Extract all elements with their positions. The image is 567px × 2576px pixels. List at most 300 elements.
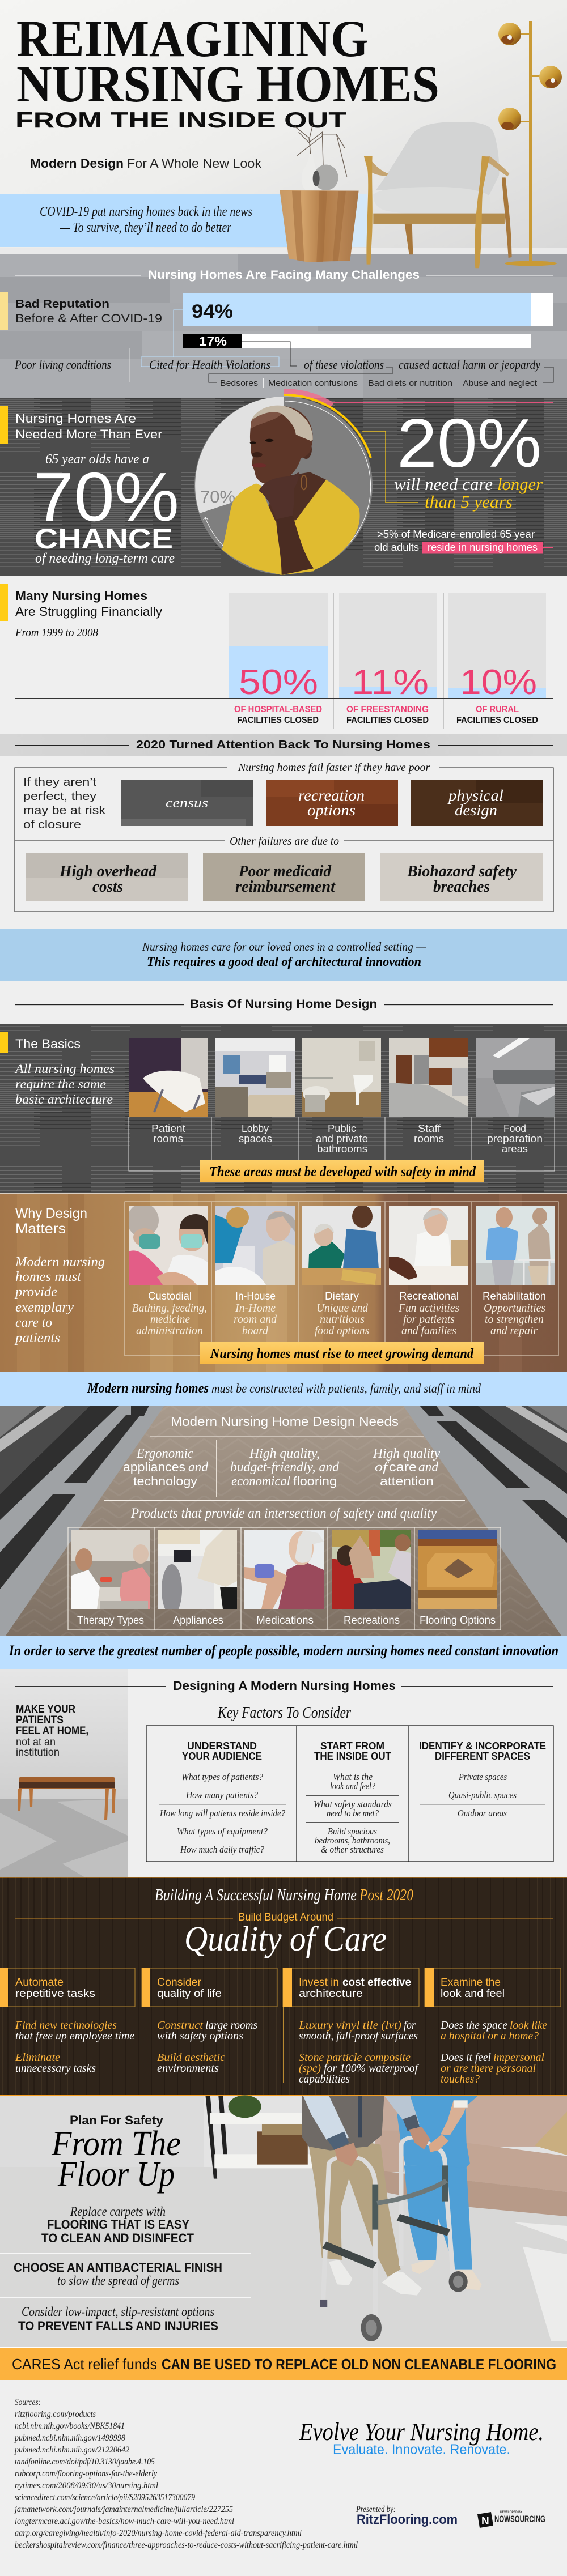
photo: man with walker [302, 2096, 422, 2296]
section title: struggling: Are Struggling Financially [15, 604, 162, 619]
care labels: food options [315, 1325, 369, 1337]
card: examine: a hospital or a home? [441, 2030, 539, 2042]
room labels: Staff [418, 1123, 441, 1134]
column: start from the inside out: What is the [333, 1772, 373, 1782]
panel: why design matters [0, 1194, 567, 1372]
need: quality of care: and [418, 1460, 439, 1475]
room labels: preparation [487, 1133, 543, 1144]
need: ergonomic appliances: and [188, 1460, 209, 1475]
banner: cares act: CARES Act relief funds [12, 2356, 157, 2373]
panel: basis heading: Basis Of Nursing Home Design [190, 998, 377, 1011]
heading: designing: Designing A Modern Nursing Homes [173, 1679, 396, 1693]
box: recreation options [266, 780, 398, 826]
card: consider: Consider [157, 1977, 202, 1989]
card: invest: cost effective [342, 1977, 411, 1989]
closing message [299, 2418, 544, 2458]
panel: designing a modern nursing home [0, 1669, 567, 1877]
room labels: and private [316, 1133, 368, 1144]
presented by ritzflooring [356, 2505, 458, 2527]
column: start from the inside out: START FROM [320, 1740, 384, 1752]
frame: products [68, 1527, 501, 1630]
blue band: constructed with patients in mind: must be constructed with patients, family, and staff in mind [211, 1381, 481, 1395]
violation types: Abuse and neglect [463, 378, 538, 388]
products heading: Products that provide an intersection of safety and quality [130, 1506, 437, 1521]
closing message: Evaluate. Innovate. Renovate. [333, 2442, 510, 2458]
closure risk text: If they aren’t [23, 776, 97, 789]
need: ergonomic appliances [123, 1446, 209, 1488]
box: biohazard safety breaches: breaches [433, 878, 490, 896]
photo: kitchen [476, 1038, 555, 1117]
care labels [132, 1291, 546, 1337]
safety heading: From The [51, 2124, 181, 2163]
patients message: institution [16, 1747, 60, 1759]
panel: financial struggle [0, 576, 567, 929]
column: understand your audience: UNDERSTAND [187, 1740, 257, 1752]
care labels: administration [136, 1325, 203, 1337]
photo: flooring options [418, 1530, 497, 1609]
violation types: Medication confusions [268, 378, 358, 388]
care labels: Rehabilitation [483, 1291, 546, 1302]
section title: the basics: The Basics [15, 1037, 81, 1051]
subtitle: Modern Design [30, 156, 124, 171]
need: budget-friendly flooring [230, 1446, 340, 1489]
subtitle: For A Whole New Look [127, 156, 262, 171]
card: automate: Find new technologies [15, 2019, 117, 2032]
panel: footer [0, 2380, 567, 2576]
column: start from the inside out: THE INSIDE OUT [314, 1751, 391, 1762]
safety tip: carpets: TO CLEAN AND DISINFECT [41, 2231, 194, 2245]
photo: nurse [384, 2096, 482, 2290]
section title: the basics: require the same [15, 1077, 106, 1091]
panel: hero [0, 0, 567, 398]
callout: safety: These areas must be developed with safety in mind [209, 1165, 476, 1180]
product labels: Flooring Options [420, 1615, 496, 1627]
lamp [498, 21, 562, 266]
section title: the basics: All nursing homes [14, 1062, 115, 1076]
photo: medications [244, 1530, 324, 1609]
card: examine: look like [510, 2019, 547, 2032]
card: invest: Stone particle composite [299, 2051, 411, 2064]
stat: 20 percent [394, 405, 543, 512]
column: start from the inside out: Build spacious [328, 1826, 377, 1837]
column: understand your audience: What types of equipment? [177, 1826, 268, 1837]
callout: growing demand [200, 1342, 484, 1364]
photo: walker [320, 2127, 468, 2341]
chart: closures: FACILITIES CLOSED [237, 716, 319, 725]
card: automate [0, 1968, 135, 2075]
heading: post 2020: Building A Successful Nursing Home [155, 1887, 357, 1904]
section title: the basics: basic architecture [15, 1092, 113, 1106]
violation types: Bedsores [220, 378, 258, 388]
violations text: Poor living conditions [14, 357, 111, 372]
photo: therapy types [71, 1530, 150, 1609]
card: invest: for [404, 2019, 416, 2032]
closure risk text: may be at risk [23, 804, 106, 817]
card: consider: Build aesthetic [157, 2051, 225, 2064]
room labels: rooms [414, 1133, 444, 1144]
patients message: FEEL AT HOME, [16, 1725, 88, 1737]
patients message: MAKE YOUR [16, 1704, 75, 1715]
violations text: Cited for Health Violations [149, 357, 270, 372]
stat: 70 percent: of needing long-term care [35, 551, 175, 566]
column: understand your audience: How many patients? [185, 1790, 258, 1800]
chart: closures [15, 593, 553, 729]
heading: design needs: Modern Nursing Home Design Needs [171, 1414, 399, 1429]
sources: ritzflooring.com/products [15, 2409, 96, 2419]
care labels: Custodial [148, 1291, 192, 1302]
section title: bad reputation: Before & After COVID-19 [15, 312, 162, 325]
sources: pubmed.ncbi.nlm.nih.gov/1499998 [14, 2433, 125, 2443]
yellow connector [362, 431, 418, 503]
box: physical design [411, 780, 543, 826]
connectors [129, 310, 553, 382]
patients message: not at an [16, 1736, 56, 1748]
product labels: Recreations [344, 1615, 400, 1627]
section title: why design matters: exemplary [15, 1300, 74, 1315]
column: understand your audience: What types of patients? [181, 1772, 263, 1782]
heading: challenges: Nursing Homes Are Facing Many Challenges [148, 269, 420, 282]
column: start from the inside out: need to be met? [327, 1808, 379, 1819]
need: ergonomic appliances: appliances [123, 1460, 185, 1474]
chart: closures: OF HOSPITAL-BASED [234, 705, 322, 714]
room labels: rooms [153, 1133, 183, 1144]
column: start from the inside out: What safety standards [314, 1799, 392, 1809]
panel: building a successful nursing home [0, 1877, 567, 2096]
panel: the basics [0, 1024, 567, 1193]
stat: 70 percent: 65 year olds have a [45, 452, 149, 467]
stat: 20 percent: will need care [394, 474, 493, 494]
card: consider: large rooms [205, 2019, 257, 2032]
violations text [14, 357, 540, 372]
card: examine [425, 1968, 561, 2085]
closure risk text [23, 776, 106, 831]
box: high overhead costs: High overhead [59, 863, 157, 880]
section title: bad reputation [0, 292, 162, 330]
room labels: spaces [239, 1133, 272, 1144]
need: ergonomic appliances: Ergonomic [136, 1446, 193, 1461]
panel: challenges [0, 269, 553, 388]
section title: needed: Nursing Homes Are [15, 411, 136, 425]
section title: struggling: Many Nursing Homes [15, 589, 147, 603]
need: budget-friendly flooring: High quality, [249, 1446, 320, 1461]
callout: growing demand: Nursing homes must rise to meet growing demand [210, 1347, 474, 1361]
card: examine: Does it feel [440, 2051, 491, 2064]
patients message: PATIENTS [16, 1714, 64, 1726]
safety tip: carpets: FLOORING THAT IS EASY [47, 2217, 189, 2232]
card: examine: Examine the [441, 1977, 501, 1989]
stat: 20 percent: 20% [397, 405, 541, 482]
bar: 94 percent [183, 293, 553, 326]
medicare note: >5% of Medicare-enrolled 65 year [377, 529, 535, 540]
chair [364, 122, 512, 268]
photo: dietary [302, 1206, 381, 1285]
blue band: constructed with patients in mind [0, 1372, 567, 1406]
sources: pubmed.ncbi.nlm.nih.gov/21220642 [14, 2445, 129, 2455]
card: examine: touches? [441, 2073, 480, 2085]
room labels: bathrooms [317, 1143, 367, 1155]
logo: nowsourcing: N [481, 2515, 489, 2527]
section title: bad reputation: Bad Reputation [15, 298, 109, 310]
table: key factors [146, 1726, 553, 1862]
card: invest: Luxury vinyl tile (lvt) [298, 2019, 401, 2032]
care labels: In-House [235, 1291, 276, 1302]
sources [14, 2398, 358, 2550]
safety tip: carpets: Replace carpets with [70, 2204, 166, 2219]
card: invest [283, 1968, 419, 2085]
care labels: nutritious [320, 1313, 365, 1326]
key factors heading: Key Factors To Consider [217, 1704, 351, 1722]
card: invest: Invest in [299, 1977, 339, 1989]
column: start from the inside out: & other structures [321, 1844, 384, 1855]
care labels: for patients [403, 1313, 455, 1326]
chart: closures: OF RURAL [476, 705, 519, 714]
presented by ritzflooring: Presented by: [356, 2505, 396, 2514]
sources: rubcorp.com/flooring-options-for-the-elderly [15, 2469, 158, 2479]
box: recreation options: options [307, 802, 356, 819]
section title: the basics [0, 1032, 115, 1106]
frame: failure factors [15, 761, 553, 912]
title: FROM THE INSIDE OUT [15, 108, 346, 133]
safety heading [51, 2113, 181, 2194]
section title: why design matters: patients [14, 1331, 60, 1346]
card: automate: that free up employee time [15, 2030, 134, 2042]
sources: beckershospitalreview.com/finance/three-approaches-to-reduce-costs-without-sacrificing-patient-care.html [15, 2540, 358, 2550]
medicare note: old adults [374, 542, 419, 553]
section title: struggling: From 1999 to 2008 [15, 627, 98, 639]
need: quality of care: High quality [373, 1446, 440, 1461]
card: invest: architecture [299, 1988, 363, 2000]
photo: staff room [389, 1038, 468, 1117]
box: poor medicaid reimbursement: Poor medicaid [238, 863, 332, 880]
photo: custodial [129, 1206, 208, 1285]
chart: closures: 50% [239, 663, 318, 702]
room labels: areas [502, 1143, 528, 1155]
presented by ritzflooring: RitzFlooring.com [357, 2512, 458, 2527]
care labels: In-Home [235, 1302, 276, 1314]
box: census [121, 780, 253, 826]
blue band: constant innovation [0, 1636, 567, 1669]
care labels: Unique and [316, 1302, 369, 1314]
chart: closures: FACILITIES CLOSED [456, 716, 538, 725]
photo: rehabilitation [476, 1206, 555, 1285]
photo: lobby [215, 1038, 295, 1117]
sources: jamanetwork.com/journals/jamainternalmedicine/fullarticle/227255 [14, 2505, 233, 2514]
section title: needed: Needed More Than Ever [15, 427, 162, 441]
violation types: Bad diets or nutrition [368, 378, 452, 388]
stat: 20 percent: than 5 years [425, 492, 513, 512]
column: start from the inside out: bedrooms, bathrooms, [315, 1835, 390, 1846]
card: examine: look and feel [441, 1988, 505, 2000]
sources: longtermcare.acl.gov/the-basics/how-much-care-will-you-need.html [15, 2517, 234, 2526]
section title: why design matters: care to [15, 1315, 52, 1330]
section title: why design matters: Modern nursing [15, 1255, 105, 1270]
photo: patient room [129, 1038, 208, 1117]
card: examine: Does the space [440, 2019, 507, 2032]
bar: 17 percent: 17% [199, 334, 227, 348]
column: understand your audience: How long will patients reside inside? [159, 1808, 285, 1819]
card: automate: unnecessary tasks [15, 2062, 96, 2075]
medicare note: reside in nursing homes [428, 542, 538, 553]
photo: bathroom [302, 1038, 381, 1117]
pie chart with portrait: 70% [200, 488, 235, 506]
card: invest: (spc) [299, 2062, 321, 2075]
column: understand your audience [159, 1740, 286, 1855]
photo: recreations [332, 1530, 411, 1609]
care labels: room and [234, 1313, 277, 1326]
chart: closures: OF FREESTANDING [346, 705, 429, 714]
column: identify and incorporate spaces: DIFFERENT SPACES [435, 1751, 530, 1762]
box: physical design: physical [447, 787, 503, 804]
logo: nowsourcing [477, 2511, 545, 2528]
closure risk text: perfect, they [23, 790, 96, 803]
violations text: caused actual harm or jeopardy [399, 357, 540, 372]
blue band: architectural innovation: Nursing homes care for our loved ones in a controlled setting — [142, 940, 426, 953]
blue intro band: — To survive, they’ll need to do better [60, 220, 232, 235]
title: NURSING HOMES [16, 55, 439, 113]
title: REIMAGINING [16, 10, 369, 67]
violation types [220, 378, 538, 388]
need: ergonomic appliances: technology [133, 1474, 197, 1488]
card: automate: Eliminate [15, 2051, 60, 2064]
heading band: 2020 [0, 734, 567, 756]
sources: sciencedirect.com/science/article/pii/S2095263517300079 [15, 2493, 195, 2502]
sources: tandfonline.com/doi/pdf/10.3130/jaabe.4.105 [15, 2457, 155, 2467]
box: poor medicaid reimbursement: reimbursement [235, 878, 336, 896]
logo: nowsourcing: DEVELOPED BY [500, 2511, 522, 2514]
product labels: Appliances [173, 1615, 223, 1627]
violations text: of these violations [304, 357, 384, 372]
care labels: Fun activities [398, 1302, 459, 1314]
panel: plan for safety [0, 2095, 567, 2348]
sources: ncbi.nlm.nih.gov/books/NBK51841 [15, 2421, 125, 2431]
card: examine: impersonal [493, 2051, 544, 2064]
floor [0, 254, 567, 398]
safety tip: antibacterial: CHOOSE AN ANTIBACTERIAL FINISH [14, 2260, 222, 2275]
column: understand your audience: YOUR AUDIENCE [182, 1751, 262, 1762]
photo: appliances [158, 1530, 237, 1609]
care labels: Dietary [325, 1291, 359, 1302]
column: identify and incorporate spaces: Private spaces [458, 1772, 507, 1782]
product labels: Therapy Types [77, 1615, 144, 1627]
section title: why design matters: Matters [15, 1221, 66, 1237]
safety heading: Floor Up [57, 2155, 175, 2194]
column: identify and incorporate spaces: Outdoor areas [458, 1808, 507, 1819]
panel: needed more than ever [0, 389, 567, 576]
frame: failure factors: Nursing homes fail faster if they have poor [238, 761, 430, 774]
box: poor medicaid reimbursement [203, 853, 365, 901]
frame: care columns [125, 1202, 558, 1356]
section title: why design matters: provide [14, 1285, 57, 1300]
care labels: Opportunities [484, 1302, 545, 1314]
safety tip: antibacterial [14, 2260, 222, 2288]
care labels: and families [401, 1325, 456, 1337]
box: high overhead costs [26, 853, 188, 901]
need: budget-friendly flooring: economical [231, 1474, 290, 1489]
chart: closures: 11% [352, 663, 429, 702]
stat: 70 percent: CHANCE [35, 523, 173, 555]
photo: recreational [389, 1206, 468, 1285]
portrait [222, 406, 360, 575]
safety tip: slip-resistant: Consider low-impact, slip-resistant options [22, 2305, 214, 2319]
safety tip: slip-resistant: TO PREVENT FALLS AND INJURIES [18, 2319, 218, 2333]
side table [280, 190, 359, 262]
column: identify and incorporate spaces: Quasi-public spaces [448, 1790, 517, 1800]
safety tip: antibacterial: to slow the spread of germs [57, 2273, 179, 2288]
section title: struggling [0, 584, 162, 639]
section title: why design matters: homes must [15, 1270, 82, 1284]
card: consider: quality of life [157, 1988, 222, 2000]
bar: 17 percent [183, 334, 531, 348]
box: physical design: design [455, 802, 497, 819]
column: understand your audience: How much daily traffic? [180, 1844, 264, 1855]
heading band: 2020: 2020 Turned Attention Back To Nursing Homes [136, 739, 430, 751]
need: quality of care: care [389, 1460, 417, 1474]
room labels: Patient [151, 1123, 185, 1134]
panel: design needs hallway [0, 1406, 567, 1636]
blue band: constructed with patients in mind: Modern nursing homes [87, 1381, 209, 1396]
card: invest: for 100% waterproof [324, 2062, 419, 2075]
care labels: medicine [150, 1313, 190, 1326]
card: automate: Automate [15, 1977, 64, 1989]
panel: basis heading [0, 981, 567, 1024]
stat: 70 percent [33, 452, 179, 566]
card: invest: smooth, fall-proof surfaces [299, 2030, 418, 2042]
product labels [77, 1615, 496, 1627]
blue band: architectural innovation: This requires a good deal of architectural innovation [147, 955, 421, 969]
sources: Sources: [15, 2398, 41, 2407]
pink line [333, 402, 553, 403]
section title: why design matters: Why Design [15, 1206, 87, 1221]
safety tip: carpets [41, 2204, 194, 2245]
closure risk text: of closure [23, 819, 81, 831]
title [15, 10, 439, 133]
side photo with bench [0, 1669, 128, 1877]
pie chart with portrait [194, 389, 373, 575]
safety tip: slip-resistant [18, 2305, 218, 2333]
box: recreation options: recreation [298, 787, 365, 804]
need: budget-friendly flooring: budget-friendly, and [230, 1460, 340, 1475]
section title: needed [0, 406, 162, 444]
photo: shelf [205, 2095, 314, 2179]
card: consider: Construct [157, 2019, 203, 2032]
card: consider: environments [157, 2062, 219, 2075]
column: start from the inside out [306, 1740, 399, 1855]
card: consider: with safety options [157, 2030, 243, 2042]
bar: 94 percent: 94% [192, 301, 233, 322]
blue intro band: COVID-19 put nursing homes back in the news [40, 205, 252, 219]
care labels: to strengthen [485, 1313, 544, 1326]
column: identify and incorporate spaces [419, 1740, 546, 1819]
column: start from the inside out: look and feel? [330, 1781, 375, 1791]
need: quality of care [373, 1446, 440, 1488]
column: identify and incorporate spaces: IDENTIFY & INCORPORATE [419, 1740, 546, 1752]
need: budget-friendly flooring: flooring [293, 1474, 337, 1488]
safety heading: Plan For Safety [70, 2113, 164, 2127]
stat: 20 percent: longer [497, 474, 543, 494]
room labels: Public [328, 1123, 356, 1134]
banner: cares act [0, 2347, 567, 2380]
box: biohazard safety breaches [380, 853, 543, 901]
sources: aarp.org/caregiving/health/info-2020/nursing-home-covid-federal-aid-transparency.html [15, 2528, 302, 2538]
room labels: Food [503, 1123, 526, 1134]
vases and branches [295, 125, 347, 190]
sources: nytimes.com/2008/09/30/us/30nursing.html [15, 2481, 159, 2490]
care labels: Bathing, feeding, [132, 1302, 207, 1314]
product labels: Medications [256, 1615, 314, 1627]
room labels [151, 1123, 543, 1155]
card: invest: capabilities [299, 2073, 350, 2085]
patients message [16, 1704, 88, 1759]
